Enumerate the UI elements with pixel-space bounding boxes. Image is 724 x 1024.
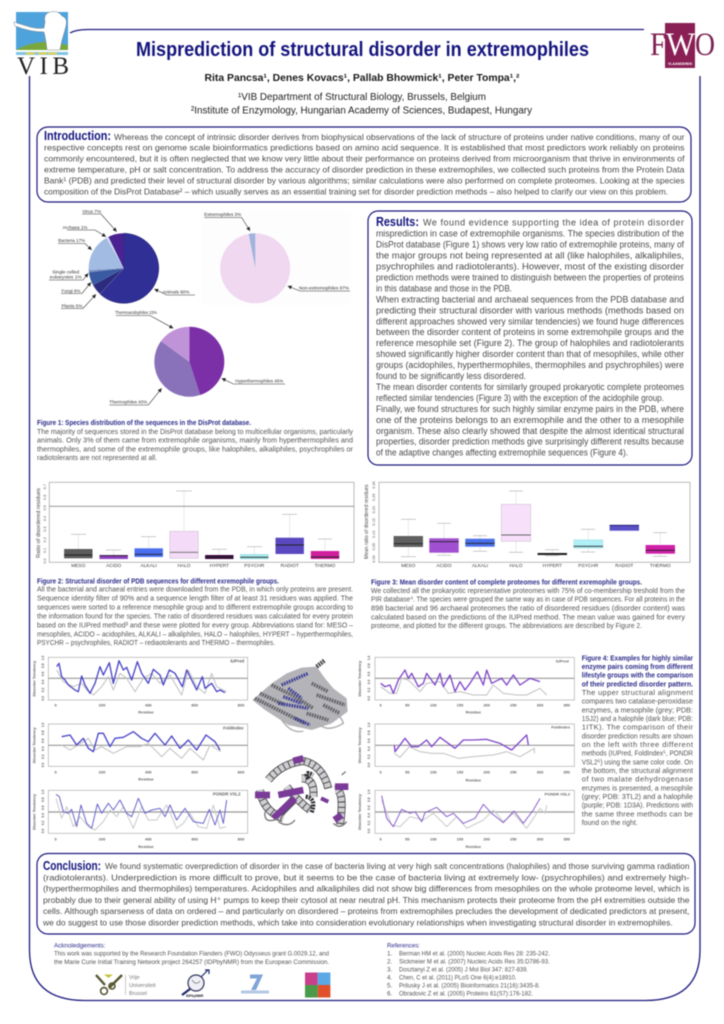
figure 2 caption: Figure 2: Structural disorder of PDB sequences for different exremophile groups. <box>37 576 279 586</box>
figure 4 caption: on the left with three different <box>582 740 694 749</box>
acknowledgements <box>54 942 329 966</box>
introduction text: Whereas the concept of intrinsic disorder derives from biophysical observations of the lack of structure of proteins under native conditions, many of our <box>114 132 685 142</box>
chart: right disorder plots: 0.4 <box>367 746 371 751</box>
figure 4 caption: compares two catalase-peroxidase <box>582 697 693 706</box>
results text: organism. These also clearly showed that despite the almost identical structural <box>376 426 684 436</box>
chart: right disorder plots: 200 <box>483 770 491 775</box>
introduction text <box>44 132 685 197</box>
chart: left disorder plots: 600 <box>191 702 199 707</box>
chart: right disorder plots: 0.0 <box>367 829 371 833</box>
logo: coloured squares <box>305 972 330 998</box>
chart: right disorder plots: 0.2 <box>367 688 371 692</box>
conclusion text: (radiotolerants). Underprediction is more difficult to prove, but it seems to be the case of bacteria living at extremely low- (psychrophiles) and extremely high- <box>43 872 690 882</box>
introduction text: extreme temperature, pH or salt concentration. To address the accuracy of disorder prediction in these extremophiles, we collected such proteins from the Protein Data <box>44 165 685 175</box>
logo: FWO: W <box>666 27 696 63</box>
title: Misprediction of structural disorder in extremophiles <box>136 39 589 61</box>
chart: right disorder plots: Disorder Tendency <box>357 727 362 763</box>
chart: left disorder plots: 0.8 <box>41 663 45 668</box>
chart: left disorder plots: 400 <box>145 770 152 775</box>
conclusion text: We found systematic overprediction of disorder in the case of bacteria living at very high salt concentrations (halophiles) and those surviving gamma radiation <box>105 861 690 871</box>
chart: right disorder plots: 250 <box>510 836 517 841</box>
chart: figure 3 box plot: 0.25 <box>372 494 376 501</box>
chart: left disorder plots: Disorder Tendency <box>32 660 37 697</box>
figure 4 caption: 1SJ2) and a halophile (dark blue; PDB: <box>582 714 693 723</box>
chart: figure 3 box plot: PSYCHR <box>578 563 599 569</box>
references <box>387 942 550 997</box>
panel: results <box>368 211 692 465</box>
results text: showed significantly higher disorder content than that of mesophiles, while other <box>376 349 684 359</box>
figure 4 caption: the same three methods can be <box>582 809 693 818</box>
introduction text: composition of the DisProt Database² – which usually serves as an essential training set for disorder prediction methods – also helped to clarify our view on this problem. <box>44 187 668 197</box>
introduction text: Bank¹ (PDB) and predicted their level of structural disorder by various algorithms; similar calculations were also performed on complete proteomes. Looking at the species <box>44 176 684 186</box>
figure 4 caption: The upper structural alignment <box>582 688 694 697</box>
chart: figure 3 box plot: HALO <box>509 563 523 569</box>
chart: right disorder plots: 0.6 <box>367 738 371 743</box>
chart: left disorder plots: 0.2 <box>41 688 45 692</box>
chart: left disorder plots: 1.0 <box>41 656 45 660</box>
chart: left disorder plots: 0 <box>55 702 58 707</box>
figure 4 caption <box>582 653 694 827</box>
chart: figure 2 box plot: ALKALI <box>141 563 157 569</box>
figure 2 caption: based on the IUPred method³ and these were plotted for every group. Abbreviations stand for: MESO – <box>37 620 354 629</box>
chart: right disorder plots: 0 <box>380 836 383 841</box>
references: Prilusky J et al. (2005) Bioinformatics 21(16):3435-8. <box>399 982 540 989</box>
chart: right disorder plots: 100 <box>430 702 437 707</box>
figure 3 caption: We collected all the prokaryotic representative proteomes with 75% of co-membership treshold from the <box>371 586 685 595</box>
chart: left disorder plots: Residue <box>138 710 155 715</box>
conclusion text <box>42 861 690 927</box>
results text: reference mesophile set (Figure 2). The group of halophiles and radiotolerants <box>376 338 684 348</box>
chart: left disorder plots: 400 <box>145 836 152 841</box>
chart: right disorder plots: 1.0 <box>367 723 371 727</box>
results text: prediction methods were trained to distinguish between the properties of proteins <box>376 272 684 282</box>
chart: right disorder plots: 150 <box>457 770 464 775</box>
chart: figure 3 box plot: 0.15 <box>372 518 376 526</box>
results text: When extracting bacterial and archaeal sequences from the PDB database and <box>376 294 684 304</box>
results text: We found evidence supporting the idea of protein disorder <box>423 218 684 228</box>
chart: extremophile share pie: Non-extremophiles 97% <box>299 286 350 292</box>
results text: The mean disorder contents for similarly grouped prokaryotic complete proteomes <box>376 382 684 392</box>
chart: right disorder plots: 0.6 <box>367 672 371 676</box>
chart: right disorder plots: 50 <box>405 836 410 841</box>
chart: species distribution pie: Animals 60% <box>162 290 190 296</box>
chart: figure 2 box plot <box>36 482 354 569</box>
chart: left disorder plots: 400 <box>145 702 152 707</box>
chart: left disorder plots: IUPred <box>230 659 245 664</box>
chart: figure 3 box plot <box>364 481 690 569</box>
chart: left disorder plots: Disorder Tendency <box>32 727 37 763</box>
logo: Vrije Universiteit Brussel: Vrije <box>129 975 140 981</box>
results text: psychrophiles and radiotolerants). However, most of the existing disorder <box>376 262 684 272</box>
panel: conclusion <box>37 854 695 934</box>
chart: left disorder plots: 600 <box>191 770 199 775</box>
chart: right disorder plots: 0.2 <box>367 754 371 759</box>
chart: right disorder plots: 0 <box>380 702 383 707</box>
chart: figure 3 box plot: HYPERT <box>543 563 562 569</box>
chart: right disorder plots <box>357 656 574 849</box>
panel: introduction <box>37 127 691 202</box>
logo: IDPbyNMR <box>182 970 209 998</box>
chart: right disorder plots: 0.6 <box>367 805 371 810</box>
chart: figure 2 box plot: 0.0 <box>43 558 47 564</box>
conclusion text: probably due to their general ability of using H⁺ pumps to keep their cytosol at near neutral pH. This mechanism protects their proteome from the pH extremities outside the <box>43 895 690 905</box>
chart: left disorder plots: 0.4 <box>41 746 45 751</box>
chart: left disorder plots <box>32 656 248 849</box>
acknowledgements: This work was supported by the Research Foundation Flanders (FWO) Odysseus grant G.0029.12, and <box>54 950 329 958</box>
chart: figure 3 box plot: 0.30 <box>372 481 376 489</box>
chart: figure 2 box plot: 0.3 <box>43 526 47 532</box>
chart: left disorder plots: 800 <box>238 770 245 775</box>
references: 4. <box>387 975 393 982</box>
chart: extremophile group pie: Thermoacidophiles 15% <box>115 310 158 316</box>
chart: left disorder plots: 600 <box>191 836 199 841</box>
chart: right disorder plots: Residue <box>466 710 482 715</box>
introduction text: commonly encountered, but it is often neglected that we know very little about their performance on proteins derived from microorganism that thrive in environments of <box>44 154 685 164</box>
figure 3 caption: 898 bacterial and 96 archaeal proteomes the ratio of disordered residues (disorder content) was <box>371 603 685 612</box>
chart: left disorder plots: FoldIndex <box>223 725 244 730</box>
chart: left disorder plots: 1.0 <box>41 790 45 794</box>
chart: left disorder plots: 0.6 <box>41 738 45 743</box>
chart: left disorder plots: 0 <box>55 836 58 841</box>
chart: figure 2 box plot: THERMO <box>315 563 336 569</box>
chart: left disorder plots: 0.4 <box>41 813 45 818</box>
chart: right disorder plots: 0.4 <box>367 680 371 684</box>
acknowledgements: the Marie Curie Initial Training Network project 264257 (IDPbyNMR) from the European Commission. <box>54 959 329 966</box>
chart: right disorder plots: 250 <box>510 702 517 707</box>
chart: left disorder plots: PONDR VSL2 <box>213 792 241 797</box>
affiliations: ¹VIB Department of Structural Biology, Brussels, Belgium <box>238 92 486 103</box>
figure 4 caption: enzyme pairs coming from different <box>582 662 693 671</box>
chart: right disorder plots: 300 <box>537 836 544 841</box>
chart: species distribution pie <box>49 209 195 310</box>
conclusion text: (hyperthermophiles and thermophiles) temperatures. Acidophiles and alkaliphiles did not show big differences from mesophiles on the whole proteome level, which is <box>43 884 689 894</box>
chart: figure 2 box plot: RADIOT <box>281 563 299 569</box>
figure 4 caption: the bottom, the structural alignment <box>582 766 694 775</box>
figure 2 caption: All the bacterial and archaeal entries were downloaded from the PDB, in which only proteins are present. <box>37 585 353 594</box>
references: Sickmeier M et al. (2007) Nucleic Acids Res 35:D786-93. <box>399 959 550 966</box>
references: Berman HM et al. (2000) Nucleic Acids Res 28: 235-242. <box>399 950 550 957</box>
chart: left disorder plots: 0.0 <box>41 763 45 767</box>
chart: left disorder plots: Disorder Tendency <box>32 793 37 830</box>
figure: bottom structural alignment <box>255 758 348 826</box>
figure 1 caption <box>37 418 353 462</box>
logo: IDPbyNMR: IDPbyNMR <box>186 994 204 998</box>
chart: left disorder plots: 0.0 <box>41 696 45 701</box>
heading: introduction: Introduction: <box>44 128 111 143</box>
figure 4 caption: disorder prediction results are shown <box>582 731 693 740</box>
results text: the major groups not being represented at all (like halophiles, alkaliphiles, <box>376 251 684 261</box>
chart: right disorder plots: 350 <box>563 836 571 841</box>
results text: reflected similar tendencies (Figure 3) with the exception of the acidophile group. <box>376 393 664 403</box>
results text: DisProt database (Figure 1) shows very low ratio of extremophile proteins, many of <box>376 240 684 250</box>
chart: right disorder plots: 200 <box>483 702 491 707</box>
results text: predicting their structural disorder with various methods (methods based on <box>376 305 684 315</box>
logo: Vrije Universiteit Brussel: Universiteit <box>129 983 156 989</box>
chart: species distribution pie: Virus 7% <box>82 209 102 215</box>
figure 4 caption: 1ITK). The comparison of their <box>582 723 693 732</box>
chart: figure 2 box plot: ACIDO <box>106 563 122 569</box>
chart: right disorder plots: 0.4 <box>367 813 371 818</box>
chart: right disorder plots: 1.0 <box>367 790 371 794</box>
figure 4 caption: methods (IUPred, FoldIndex⁵, PONDR <box>582 749 693 758</box>
references: Chen, C et al. (2011) PLoS One 6(4):e18910. <box>399 975 517 982</box>
figure 1 caption: radiotolerants are not represented at all. <box>37 453 157 462</box>
chart: right disorder plots: 100 <box>430 770 437 775</box>
chart: right disorder plots: IUPred <box>556 659 569 664</box>
chart: right disorder plots: 100 <box>430 836 437 841</box>
chart: figure 2 box plot: HYPERT <box>210 563 229 569</box>
chart: extremophile group pie: Thermophiles 40% <box>109 400 148 406</box>
figure 4 caption: VSL2⁶) using the same color code. On <box>582 757 693 766</box>
logo: FWO <box>650 23 715 68</box>
chart: left disorder plots: 1.0 <box>41 723 45 727</box>
figure: top structural alignment <box>252 660 348 732</box>
chart: right disorder plots: PONDR VSL2 <box>545 792 571 797</box>
results text: misprediction in case of extremophile organisms. The species distribution of the <box>376 229 684 239</box>
logo: VIB: VIB <box>17 53 69 80</box>
figure 4 caption: of two malate dehydrogenase <box>582 775 693 784</box>
chart: left disorder plots: 0.8 <box>41 730 45 735</box>
heading: conclusion: Conclusion: <box>43 858 101 873</box>
authors: Rita Pancsa¹, Denes Kovacs¹, Pallab Bhowmick¹, Peter Tompa¹,² <box>204 72 520 84</box>
figure 3 caption: proteome, and plotted for the different groups. The abbreviations are described by Figure 2. <box>371 621 642 630</box>
chart: figure 2 box plot: MESO <box>71 563 86 569</box>
logo: Vrije Universiteit Brussel: Brussel <box>129 991 147 997</box>
chart: left disorder plots: 200 <box>99 702 106 707</box>
chart: species distribution pie: Fungi 6% <box>62 288 81 294</box>
figure 4 caption: (grey; PDB: 3TL2) and a halophile <box>582 792 693 801</box>
figure 2 caption: mesophiles, ACIDO – acidophiles, ALKALI – alkaliphiles, HALO – halophiles, HYPERT – hyperthermophiles, <box>37 629 353 638</box>
figure 4 caption: found on the right. <box>582 818 638 827</box>
chart: species distribution pie: Single celled <box>52 270 80 276</box>
chart: figure 3 box plot: THERMO <box>650 563 671 569</box>
figure 1 caption: animals. Only 3% of them came from extremophile organisms, mainly from hyperthermophiles and <box>37 436 353 445</box>
results text: of the adaptive changes affecting extremophile sequences (Figure 4). <box>376 448 628 458</box>
results text: found to be significantly less disordered. <box>376 371 526 381</box>
figure 3 caption <box>371 578 685 630</box>
references: 2. <box>387 959 393 966</box>
chart: left disorder plots: 0.8 <box>41 797 45 802</box>
heading: results: Results: <box>376 214 419 229</box>
acknowledgements: Acknoledgements: <box>54 942 106 949</box>
figure 4 caption: enzymes is presented, a mesophile <box>582 783 693 792</box>
chart: right disorder plots: 350 <box>563 770 571 775</box>
chart: figure 2 box plot: PSYCHR <box>244 563 265 569</box>
chart: left disorder plots: Residue <box>138 777 155 782</box>
chart: right disorder plots: Disorder Tendency <box>357 660 362 697</box>
chart: species distribution pie: eukaryotes 1% <box>50 274 82 280</box>
chart: right disorder plots: 1.0 <box>367 656 371 660</box>
results text <box>376 218 684 458</box>
figure 3 caption: calculated based on the predictions of the IUPred method. The mean value was gained for every <box>371 612 685 621</box>
logo: FP7 <box>241 974 269 994</box>
chart: figure 3 box plot: 0.10 <box>372 531 376 538</box>
chart: figure 2 box plot: 0.2 <box>43 537 47 542</box>
chart: figure 3 box plot: ALKALI <box>472 563 488 569</box>
chart: right disorder plots: 300 <box>537 770 544 775</box>
chart: left disorder plots: 800 <box>238 702 245 707</box>
chart: right disorder plots: Residue <box>466 844 482 849</box>
chart: right disorder plots: 200 <box>483 836 491 841</box>
chart: figure 2 box plot: 0.7 <box>43 484 47 489</box>
chart: figure 3 box plot: 0.20 <box>372 506 376 513</box>
chart: left disorder plots: 0.6 <box>41 805 45 810</box>
references: 6. <box>387 990 393 997</box>
chart: right disorder plots: 50 <box>405 770 410 775</box>
figure 2 caption: the information found for the species. The ratio of disordered residues was calculated for every protein <box>37 611 353 620</box>
chart: figure 2 box plot: 0.4 <box>43 516 47 521</box>
chart: right disorder plots: Disorder Tendency <box>357 793 362 830</box>
logo: VIB <box>14 12 69 80</box>
figure 4 caption: enzymes, a mesophile (grey; PDB: <box>582 705 693 714</box>
chart: right disorder plots: 300 <box>537 702 544 707</box>
chart: left disorder plots: 0.6 <box>41 672 45 676</box>
chart: right disorder plots: 0.8 <box>367 797 371 802</box>
chart: left disorder plots: 0.0 <box>41 829 45 833</box>
chart: right disorder plots: 0.8 <box>367 663 371 668</box>
chart: extremophile share pie: Extremophiles 3% <box>204 212 242 218</box>
chart: figure 3 box plot: 0.00 <box>372 555 376 563</box>
chart: right disorder plots: 0.8 <box>367 730 371 735</box>
affiliations <box>191 92 532 116</box>
results text: groups (acidophiles, hyperthermophiles, thermophiles and psychrophiles) were <box>376 360 684 370</box>
chart: extremophile group pie <box>109 310 285 406</box>
figure 1 caption: The majority of sequences stored in the DisProt database belong to multicellular organisms, particularly <box>37 427 353 436</box>
results text: different approaches showed very similar tendencies) we found huge differences <box>376 316 684 326</box>
chart: left disorder plots: Residue <box>138 844 155 849</box>
chart: left disorder plots: 0.4 <box>41 680 45 684</box>
affiliations: ²Institute of Enzymology, Hungarian Academy of Sciences, Budapest, Hungary <box>191 106 532 116</box>
logo: FWO: VLAANDEREN <box>668 62 693 66</box>
chart: extremophile share pie <box>202 210 351 305</box>
chart: right disorder plots: 0 <box>380 770 383 775</box>
logo: FWO: F <box>650 27 666 63</box>
results text: properties, disorder prediction methods give surprisingly different results because <box>376 437 684 447</box>
introduction text: respective concepts rest on genome scale bioinformatics predictions based on amino acid sequence. It is established that most predictors work reliably on proteins <box>44 143 684 153</box>
chart: right disorder plots: 250 <box>510 770 517 775</box>
chart: left disorder plots: 200 <box>99 836 106 841</box>
conclusion text: cells. Although sparseness of data on ordered – and particularly on disordered – proteins from extremophiles precludes the development of dedicated predictors at present, <box>43 906 690 916</box>
chart: left disorder plots: 0.2 <box>41 821 45 825</box>
references: References: <box>387 942 420 949</box>
figure 1 caption: Figure 1: Species distribution of the sequences in the DisProt database. <box>37 418 251 427</box>
chart: figure 2 box plot: 0.1 <box>43 548 47 553</box>
chart: species distribution pie: Archaea 1% <box>62 225 88 231</box>
chart: right disorder plots: FoldIndex <box>551 725 571 730</box>
chart: species distribution pie: Plants 5% <box>62 304 83 310</box>
references: 5. <box>387 982 393 989</box>
figure 3 caption: Figure 3: Mean disorder content of complete proteomes for different exremophile groups. <box>371 578 642 586</box>
chart: species distribution pie: Bacteria 17% <box>58 238 86 244</box>
figure 4 caption: lifestyle groups with the comparison <box>582 671 693 680</box>
chart: right disorder plots: Residue <box>466 778 482 783</box>
chart: figure 2 box plot: 0.6 <box>43 495 47 500</box>
results text: one of the proteins belongs to an exremophile and the other to a mesophile <box>376 415 684 425</box>
chart: right disorder plots: 0.0 <box>367 696 371 701</box>
logo: FWO: O <box>695 27 715 63</box>
figure 2 caption: Sequence identity filter of 90% and a sequence length filter of at least 31 residues was applied. The <box>37 593 353 602</box>
chart: right disorder plots: 350 <box>563 702 571 707</box>
chart: figure 3 box plot: Mean ratio of disordered residues <box>364 484 370 559</box>
figure 4 caption: of their predicted disorder pattern. <box>582 679 693 688</box>
chart: right disorder plots: 0.2 <box>367 821 371 825</box>
chart: left disorder plots: 0 <box>55 770 58 775</box>
references: 1. <box>387 950 393 957</box>
chart: figure 2 box plot: Ratio of disordered residues <box>36 488 42 558</box>
references: 3. <box>387 967 393 974</box>
chart: figure 3 box plot: RADIOT <box>615 563 633 569</box>
conclusion text: we do suggest to use those disorder prediction methods, which take into consideration evolutionary relationships when investigating structural disorder in extremophiles. <box>42 917 673 927</box>
chart: right disorder plots: 0.0 <box>367 763 371 767</box>
chart: right disorder plots: 150 <box>457 702 464 707</box>
chart: right disorder plots: 150 <box>457 836 464 841</box>
chart: right disorder plots: 50 <box>405 702 410 707</box>
chart: figure 3 box plot: ACIDO <box>436 563 452 569</box>
chart: figure 3 box plot: MESO <box>401 563 416 569</box>
results text: Finally, we found structures for such highly similar enzyme pairs in the PDB, where <box>376 404 684 414</box>
chart: extremophile group pie: Hyperthermophiles 45% <box>235 378 284 384</box>
references: Obradovic Z et al. (2005) Proteins 61(S7):176-182. <box>399 990 533 997</box>
figure 2 caption: sequences were sorted to a reference mesophile group and to different extremophile groups according to <box>37 603 353 612</box>
figure 2 caption: PSYCHR – psychrophiles, RADIOT – rediaotolerants and THERMO – thermophiles. <box>37 638 275 647</box>
results text: between the disorder content of proteins in some extremohpile groups and the <box>376 327 684 337</box>
figure 4 caption: Figure 4: Examples for highly similar <box>582 653 693 662</box>
chart: left disorder plots: 800 <box>238 836 245 841</box>
chart: left disorder plots: 0.2 <box>41 754 45 759</box>
logo: Vrije Universiteit Brussel <box>96 974 156 997</box>
references: Dosztanyi Z et al. (2005) J Mol Biol 347: 827-839. <box>399 967 528 974</box>
figure 4 caption: (purple; PDB: 1D3A). Predictions with <box>582 801 693 810</box>
chart: figure 2 box plot: 0.5 <box>43 505 47 511</box>
figure 2 caption <box>37 576 354 647</box>
chart: figure 2 box plot: HALO <box>177 563 191 569</box>
chart: figure 3 box plot: 0.05 <box>372 543 376 550</box>
figure 1 caption: thermophiles, and some of the extremophile groups, like halophiles, alkaliphiles, psychrophiles or <box>37 444 353 453</box>
chart: left disorder plots: 200 <box>99 770 106 775</box>
results text: in this database and those in the PDB. <box>376 283 512 293</box>
